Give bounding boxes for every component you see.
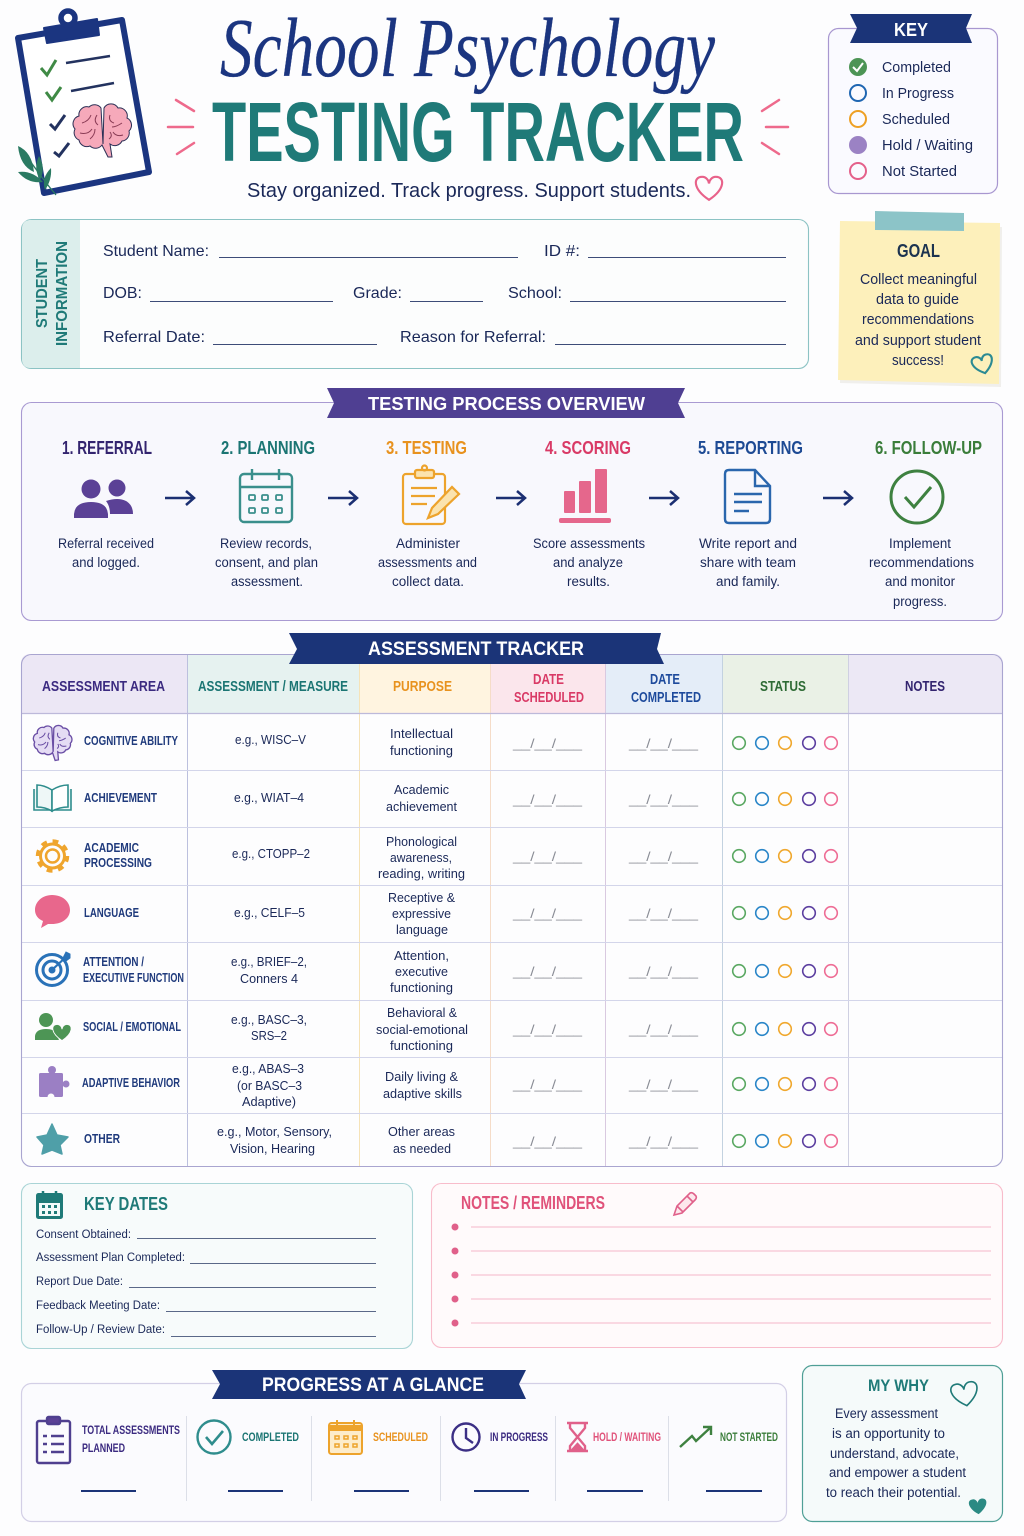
stat: total assessments planned: TOTAL ASSESSMENTS xyxy=(82,1423,180,1437)
my why text xyxy=(826,1406,966,1500)
panel: student information: Referral Date: xyxy=(103,329,205,346)
table headers: ASSESSMENT AREA xyxy=(42,679,165,695)
row: academic processing: e.g., CTOPP–2 xyxy=(232,846,310,861)
row: adaptive behavior: Daily living & xyxy=(385,1069,458,1084)
step 5 reporting: share with team xyxy=(700,555,796,570)
stat: in progress xyxy=(452,1424,548,1450)
row: adaptive behavior: __/__/___ xyxy=(628,1077,699,1092)
student info vertical heading: STUDENT xyxy=(34,259,51,328)
ribbon: progress at a glance xyxy=(212,1370,526,1399)
title block: TESTING TRACKER xyxy=(212,85,744,179)
step 2 planning: 2. PLANNING xyxy=(221,438,315,458)
row: achievement: achievement xyxy=(386,799,457,814)
arrow xyxy=(649,491,678,505)
subtitle: Stay organized. Track progress. Support students. xyxy=(247,180,691,202)
row: other: __/__/___ xyxy=(512,1134,583,1149)
row: social emotional: __/__/___ xyxy=(628,1022,699,1037)
row: cognitive ability xyxy=(33,725,837,760)
step 6 follow-up: 6. FOLLOW-UP xyxy=(875,438,982,458)
icon: heart xyxy=(696,177,722,200)
row: adaptive behavior: adaptive skills xyxy=(383,1086,462,1101)
panel: student information: ID #: xyxy=(544,243,580,260)
student info vertical heading: INFORMATION xyxy=(54,241,71,346)
step 6 follow-up: Implement xyxy=(889,536,951,551)
row: attention: __/__/___ xyxy=(628,964,699,979)
goal heading: GOAL xyxy=(897,241,940,261)
key: not started: Not Started xyxy=(882,163,957,180)
row: cognitive ability: e.g., WISC–V xyxy=(235,732,306,747)
goal text: data to guide xyxy=(876,292,959,308)
panel: key xyxy=(828,14,998,194)
row: achievement: Academic xyxy=(394,782,449,797)
row: attention: ATTENTION / xyxy=(83,955,144,969)
icon: outline heart xyxy=(950,1381,980,1408)
arrow xyxy=(165,491,194,505)
step 4 scoring: Score assessments xyxy=(533,536,645,551)
row: social emotional: SRS–2 xyxy=(251,1028,287,1043)
row: academic processing: PROCESSING xyxy=(84,856,152,870)
row: achievement: e.g., WIAT–4 xyxy=(234,790,304,805)
goal text: and support student xyxy=(855,333,981,349)
notes heading: NOTES / REMINDERS xyxy=(461,1193,605,1213)
row: cognitive ability: functioning xyxy=(390,743,453,758)
step 1 referral xyxy=(58,438,154,570)
row: attention: functioning xyxy=(390,980,453,995)
row: cognitive ability: __/__/___ xyxy=(512,736,583,751)
panel: student information: Grade: xyxy=(353,285,402,302)
row: other: as needed xyxy=(393,1141,451,1156)
stat: completed xyxy=(198,1420,299,1454)
panel: key dates: Report Due Date: xyxy=(36,1276,123,1288)
table headers: NOTES xyxy=(905,679,945,695)
row: adaptive behavior: e.g., ABAS–3 xyxy=(232,1061,304,1076)
row: attention xyxy=(36,948,837,995)
stat: hold waiting: HOLD / WAITING xyxy=(593,1430,661,1444)
key: in progress xyxy=(850,85,954,102)
row: social emotional: functioning xyxy=(390,1038,453,1053)
row: social emotional: social-emotional xyxy=(376,1022,468,1037)
decorative rays xyxy=(168,100,788,154)
row: social emotional xyxy=(35,1005,837,1053)
row: other: __/__/___ xyxy=(628,1134,699,1149)
panel: my why xyxy=(802,1366,1002,1522)
my why text: understand, advocate, xyxy=(830,1446,959,1461)
my why text: Every assessment xyxy=(835,1406,938,1421)
step 1 referral: and logged. xyxy=(72,555,140,570)
stat: scheduled xyxy=(329,1420,428,1454)
key: hold xyxy=(849,136,973,154)
key: not started xyxy=(850,163,957,180)
table headers: SCHEDULED xyxy=(514,690,584,706)
my why text: to reach their potential. xyxy=(826,1485,961,1500)
table headers: PURPOSE xyxy=(393,679,452,695)
step 6 follow-up: recommendations xyxy=(869,555,974,570)
row: language xyxy=(35,890,837,937)
table headers xyxy=(42,672,945,706)
row: academic processing: __/__/___ xyxy=(628,849,699,864)
goal text xyxy=(855,272,981,369)
row: attention: executive xyxy=(395,964,448,979)
panel: student information xyxy=(22,220,808,368)
panel: key dates: Assessment Plan Completed: xyxy=(36,1252,185,1264)
step 3 testing xyxy=(378,438,477,589)
step 2 planning: Review records, xyxy=(220,536,312,551)
row: other: e.g., Motor, Sensory, xyxy=(217,1124,332,1139)
tape xyxy=(875,211,964,231)
row: social emotional: SOCIAL / EMOTIONAL xyxy=(83,1020,181,1034)
step 3 testing: Administer xyxy=(396,536,460,551)
key: in progress: In Progress xyxy=(882,85,954,102)
goal text: Collect meaningful xyxy=(860,272,977,288)
row: academic processing: reading, writing xyxy=(378,866,465,881)
icon: pink brain xyxy=(73,104,131,157)
step 6 follow-up: and monitor xyxy=(885,574,955,589)
step 3 testing: collect data. xyxy=(392,574,464,589)
row: other xyxy=(37,1124,837,1156)
panel: progress at a glance xyxy=(22,1370,786,1522)
stat: total assessments planned: PLANNED xyxy=(82,1441,125,1455)
my why heading: MY WHY xyxy=(868,1376,930,1395)
panel: student information: Student Name: xyxy=(103,243,209,260)
row: other: Vision, Hearing xyxy=(230,1141,315,1156)
goal text: recommendations xyxy=(862,312,974,328)
row: language: __/__/___ xyxy=(628,906,699,921)
stat: scheduled: SCHEDULED xyxy=(373,1430,428,1444)
row: achievement: __/__/___ xyxy=(628,792,699,807)
row: social emotional: Behavioral & xyxy=(387,1005,457,1020)
step 4 scoring: 4. SCORING xyxy=(545,438,631,458)
row: other: Other areas xyxy=(388,1124,455,1139)
icon: pencil xyxy=(674,1193,696,1215)
ribbon: progress at a glance: PROGRESS AT A GLANCE xyxy=(262,1375,484,1396)
row: cognitive ability: Intellectual xyxy=(390,726,453,741)
table headers: ASSESSMENT / MEASURE xyxy=(198,679,348,695)
row: academic processing: ACADEMIC xyxy=(84,841,139,855)
stat: hold waiting xyxy=(567,1423,661,1451)
table headers: STATUS xyxy=(760,679,806,695)
ribbon: assessment tracker: ASSESSMENT TRACKER xyxy=(368,639,584,660)
stat: total assessments planned xyxy=(37,1417,180,1463)
row: academic processing: awareness, xyxy=(390,850,452,865)
step 4 scoring xyxy=(533,438,645,589)
arrow xyxy=(496,491,525,505)
row: social emotional: __/__/___ xyxy=(512,1022,583,1037)
step 5 reporting xyxy=(698,438,803,589)
icon: filled heart xyxy=(969,1498,987,1515)
row: cognitive ability: __/__/___ xyxy=(628,736,699,751)
row: achievement xyxy=(34,782,837,814)
row: adaptive behavior: __/__/___ xyxy=(512,1077,583,1092)
panel: goal note xyxy=(838,211,1002,387)
table headers: DATE xyxy=(650,672,680,688)
row: achievement: __/__/___ xyxy=(512,792,583,807)
step 5 reporting: Write report and xyxy=(699,536,797,551)
step 6 follow-up: progress. xyxy=(893,594,947,609)
step 2 planning: assessment. xyxy=(231,574,303,589)
arrow xyxy=(328,491,357,505)
step 1 referral: Referral received xyxy=(58,536,154,551)
row: social emotional: e.g., BASC–3, xyxy=(231,1012,307,1027)
icon: calendar xyxy=(36,1191,63,1219)
key dates heading: KEY DATES xyxy=(84,1194,168,1214)
row: attention: e.g., BRIEF–2, xyxy=(231,954,307,969)
step 2 planning: consent, and plan xyxy=(215,555,318,570)
row: adaptive behavior: Adaptive) xyxy=(242,1094,296,1109)
step 2 planning xyxy=(215,438,318,589)
panel: testing process overview xyxy=(22,388,1002,620)
panel: student information: Reason for Referral: xyxy=(400,329,546,346)
step 6 follow-up xyxy=(869,438,982,609)
key: scheduled xyxy=(850,111,950,128)
key: scheduled: Scheduled xyxy=(882,111,950,128)
row: adaptive behavior: ADAPTIVE BEHAVIOR xyxy=(82,1076,180,1090)
panel: student information: DOB: xyxy=(103,285,142,302)
key: completed xyxy=(849,58,951,76)
stat: in progress: IN PROGRESS xyxy=(490,1430,548,1444)
row: academic processing: Phonological xyxy=(386,834,457,849)
row: language: expressive xyxy=(392,906,451,921)
panel: key dates: Follow-Up / Review Date: xyxy=(36,1324,165,1336)
ribbon: assessment tracker xyxy=(289,633,664,664)
stat: not started xyxy=(680,1427,778,1447)
row: attention: __/__/___ xyxy=(512,964,583,979)
key ribbon: KEY xyxy=(894,20,928,40)
row: academic processing xyxy=(38,834,837,881)
row: achievement: ACHIEVEMENT xyxy=(84,791,157,805)
step 1 referral: 1. REFERRAL xyxy=(62,438,152,458)
step 4 scoring: results. xyxy=(567,574,610,589)
row: other: OTHER xyxy=(84,1132,120,1146)
arrow xyxy=(823,491,852,505)
panel: key dates: Feedback Meeting Date: xyxy=(36,1300,160,1312)
panel: student information: School: xyxy=(508,285,562,302)
row: attention: Conners 4 xyxy=(240,971,298,986)
row: language: language xyxy=(396,922,448,937)
key: completed: Completed xyxy=(882,59,951,76)
table headers: DATE xyxy=(533,672,564,688)
row: cognitive ability: COGNITIVE ABILITY xyxy=(84,734,179,748)
panel: key dates: Consent Obtained: xyxy=(36,1229,131,1241)
panel: notes and reminders xyxy=(432,1184,1002,1348)
row: academic processing: __/__/___ xyxy=(512,849,583,864)
step 5 reporting: and family. xyxy=(716,574,780,589)
ribbon: testing process overview: TESTING PROCESS OVERVIEW xyxy=(368,394,645,414)
icon: clipboard with brain xyxy=(18,11,149,195)
icon: leaves xyxy=(18,146,56,195)
panel: key dates xyxy=(22,1184,412,1348)
row: language: __/__/___ xyxy=(512,906,583,921)
my why text: is an opportunity to xyxy=(832,1426,945,1441)
stat: not started: NOT STARTED xyxy=(720,1430,778,1444)
ribbon: testing process overview xyxy=(327,388,685,418)
row: language: Receptive & xyxy=(388,890,455,905)
panel: assessment tracker table xyxy=(21,633,1003,1167)
bullets and lines xyxy=(452,1224,991,1326)
step 4 scoring: and analyze xyxy=(553,555,623,570)
goal text: success! xyxy=(892,353,944,369)
my why text: and empower a student xyxy=(829,1465,966,1480)
step 3 testing: assessments and xyxy=(378,555,477,570)
key ribbon xyxy=(850,14,972,43)
key: hold: Hold / Waiting xyxy=(882,137,973,154)
row: language: LANGUAGE xyxy=(84,906,139,920)
step 5 reporting: 5. REPORTING xyxy=(698,438,803,458)
table headers: COMPLETED xyxy=(631,690,701,706)
row: attention: EXECUTIVE FUNCTION xyxy=(83,971,184,985)
row: adaptive behavior: (or BASC–3 xyxy=(237,1078,302,1093)
stat: completed: COMPLETED xyxy=(242,1430,299,1444)
step 3 testing: 3. TESTING xyxy=(386,438,467,458)
title script: School Psychology xyxy=(220,2,716,95)
student info vertical heading xyxy=(34,241,71,346)
row: attention: Attention, xyxy=(394,948,449,963)
icon: teal heart xyxy=(971,353,995,376)
row: adaptive behavior xyxy=(39,1061,837,1109)
row: language: e.g., CELF–5 xyxy=(234,905,305,920)
